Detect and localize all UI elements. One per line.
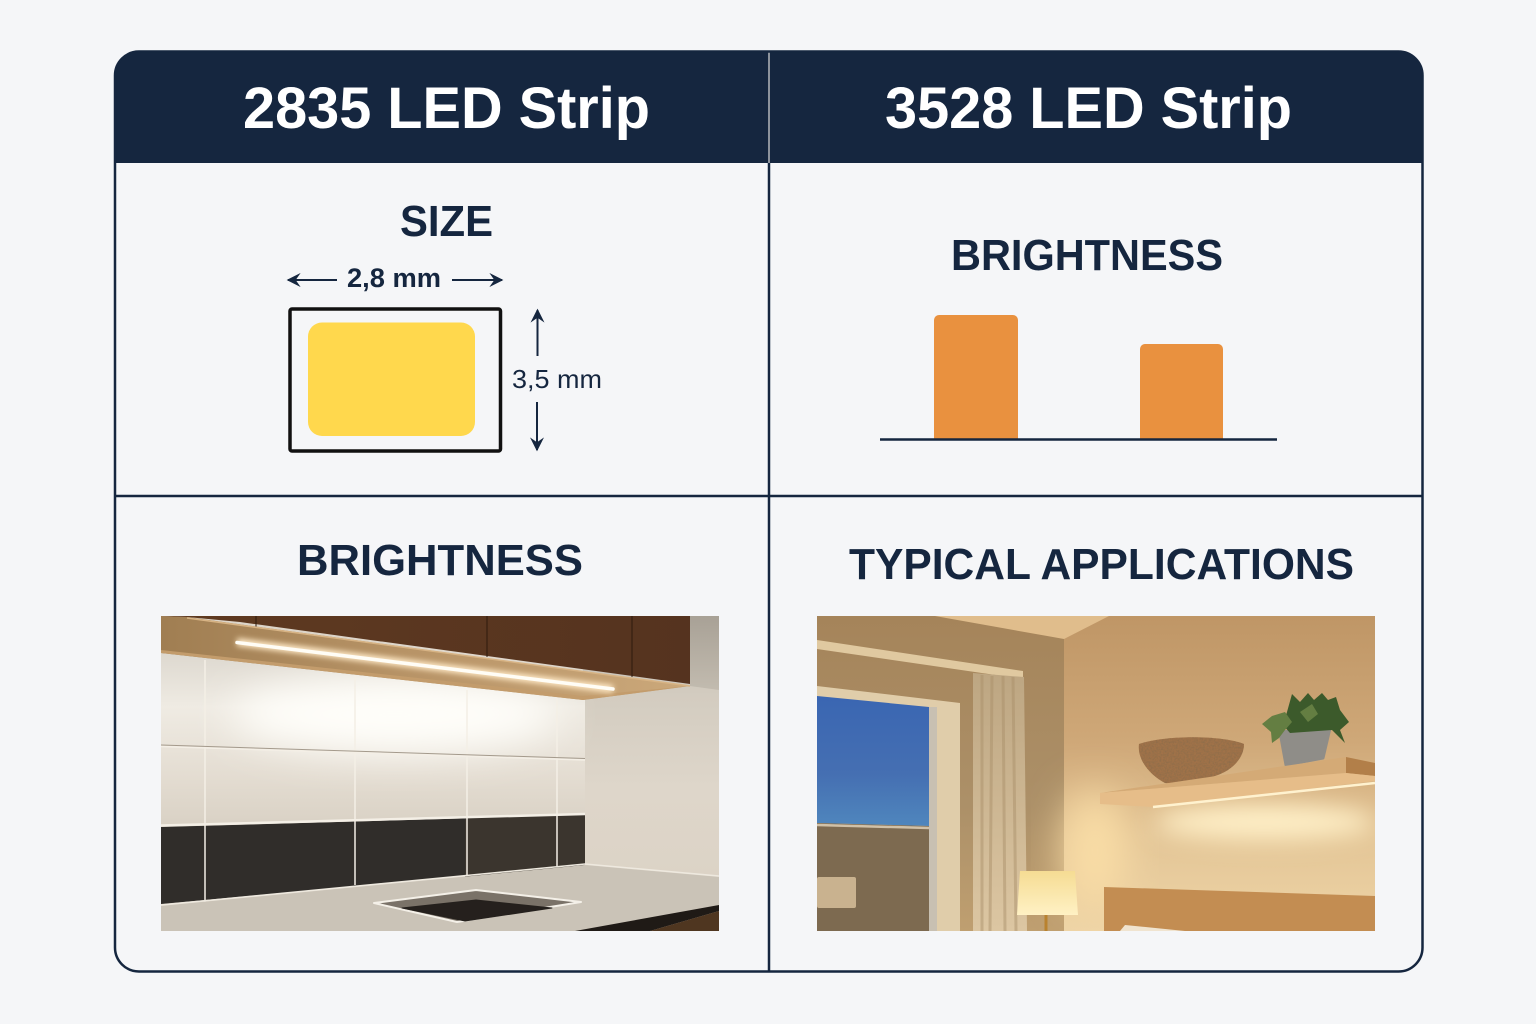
heading: size: SIZE — [400, 197, 493, 246]
header band — [115, 52, 1422, 163]
panel: size — [288, 197, 602, 451]
LED chip yellow emitter — [308, 322, 475, 436]
heading: brightness: BRIGHTNESS — [951, 231, 1223, 280]
bar: 3528 — [1140, 344, 1223, 439]
height label: 3,5 mm — [512, 364, 602, 394]
panel: typical applications — [817, 540, 1375, 931]
photo: bedroom with shelf light — [817, 616, 1375, 931]
table frame and grid — [115, 52, 1422, 972]
panel: brightness photo — [161, 536, 719, 931]
height arrows — [536, 310, 538, 450]
width arrows — [288, 279, 502, 281]
heading: 2835 LED Strip: 2835 LED Strip — [243, 76, 650, 141]
photo: kitchen under-cabinet light — [161, 616, 719, 931]
baseline — [880, 438, 1277, 441]
heading: brightness: BRIGHTNESS — [297, 536, 583, 585]
bar: 2835 — [934, 315, 1018, 439]
width label: 2,8 mm — [347, 263, 441, 293]
comparison infographic — [114, 50, 1424, 973]
heading: 3528 LED Strip: 3528 LED Strip — [885, 76, 1292, 141]
panel: brightness bars — [880, 231, 1277, 440]
heading: typical applications: TYPICAL APPLICATIONS — [849, 540, 1354, 589]
LED chip outline — [290, 309, 500, 451]
